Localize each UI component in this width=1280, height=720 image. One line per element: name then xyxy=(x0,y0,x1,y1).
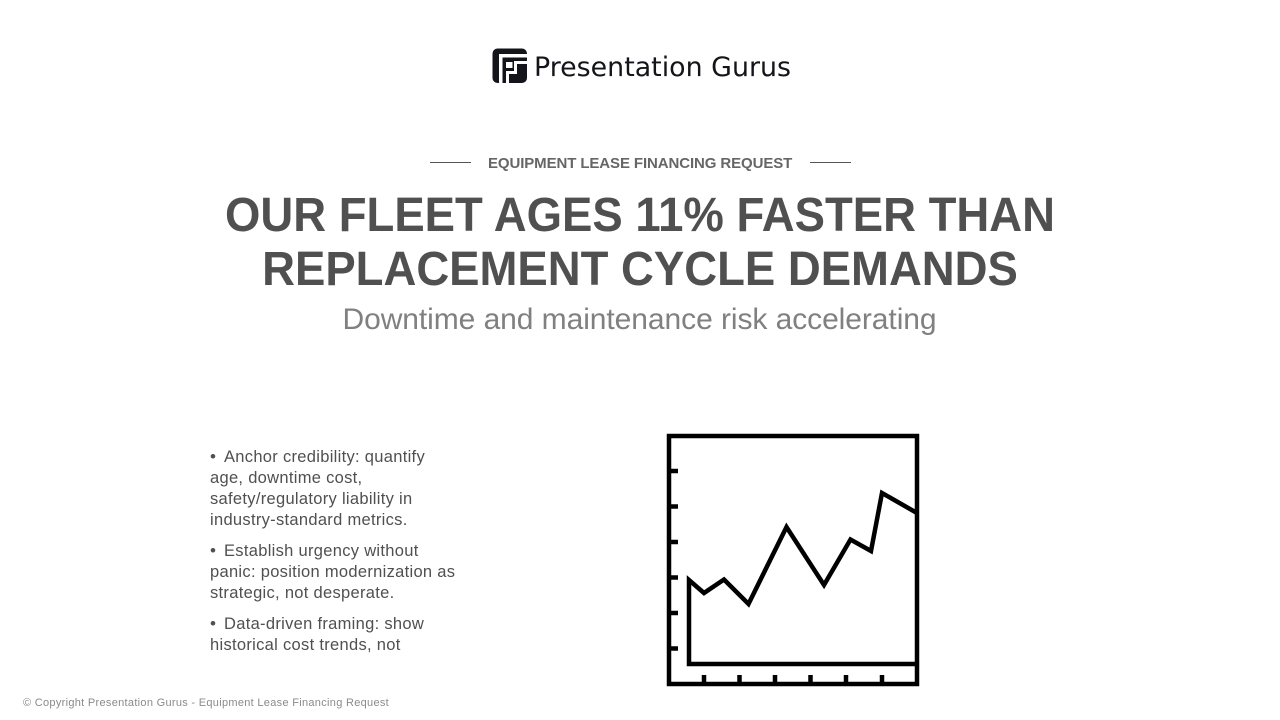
bullet 3: • xyxy=(210,614,216,633)
title: REPLACEMENT CYCLE DEMANDS xyxy=(262,242,1018,296)
bullet 1 xyxy=(210,447,425,529)
bullet 2: • xyxy=(210,541,216,560)
bullet 3: historical cost trends, not xyxy=(210,636,401,654)
bullet 2: Establish urgency without xyxy=(224,542,419,560)
eyebrow: EQUIPMENT LEASE FINANCING REQUEST xyxy=(488,155,792,172)
bullet 1: industry-standard metrics. xyxy=(210,511,408,529)
bullet 2: strategic, not desperate. xyxy=(210,584,395,602)
title: OUR FLEET AGES 11% FASTER THAN xyxy=(225,188,1055,242)
trend line xyxy=(689,493,917,664)
bullet 2: panic: position modernization as xyxy=(210,563,455,581)
bullet 1: safety/regulatory liability in xyxy=(210,490,413,508)
bullet 1: • xyxy=(210,447,216,466)
bullet 1: age, downtime cost, xyxy=(210,469,362,487)
bullet 1: Anchor credibility: quantify xyxy=(224,448,425,466)
logo: Presentation Gurus xyxy=(534,52,791,83)
bullet 3: Data-driven framing: show xyxy=(224,615,424,633)
bullet list xyxy=(210,447,455,654)
bullet 3 xyxy=(210,614,424,654)
chart frame xyxy=(669,436,917,684)
axis ticks xyxy=(669,471,882,684)
bullet 2 xyxy=(210,541,455,602)
footer: © Copyright Presentation Gurus - Equipment Lease Financing Request xyxy=(23,697,389,709)
subtitle: Downtime and maintenance risk accelerating xyxy=(342,303,937,336)
title xyxy=(225,188,1055,296)
line chart icon xyxy=(666,434,920,686)
